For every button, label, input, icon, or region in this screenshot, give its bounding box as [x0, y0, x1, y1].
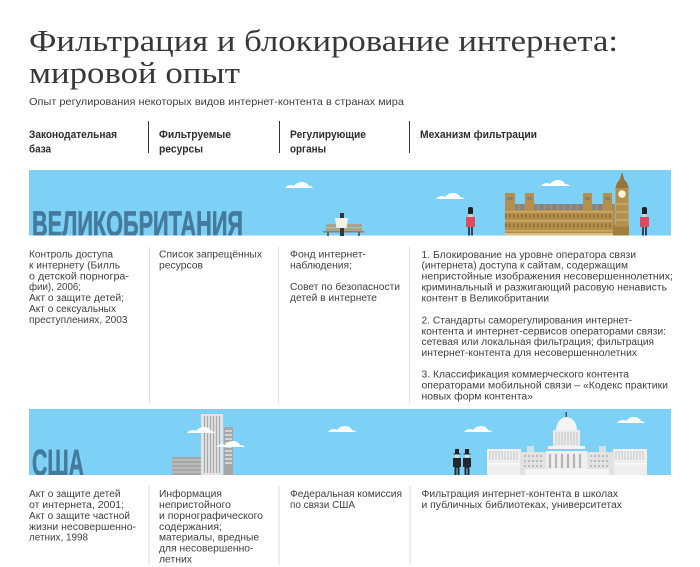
panel: USA details — [29, 486, 622, 566]
text: filtering mechanism: операторами мобильной связи – «Кодекс практики — [422, 380, 668, 392]
column headers — [29, 121, 537, 156]
title: мировой опыт — [29, 55, 241, 90]
subtitle: Опыт регулирования некоторых видов интернет-контента в странах мира — [29, 96, 404, 108]
text: legal basis: летних, 1998 — [29, 532, 88, 544]
column headers: Регулирующие — [290, 129, 366, 141]
column headers: база — [29, 144, 52, 156]
text: filtering mechanism: контента и интернет-сервисов операторами связи: — [422, 326, 666, 338]
text: legal basis: жизни несовершенно- — [29, 522, 136, 533]
text: filtering mechanism: Фильтрация интернет-контента в школах — [422, 489, 618, 500]
text: legal basis: Акт о защите детей — [29, 489, 120, 500]
column headers: органы — [290, 144, 326, 156]
text: filtering mechanism: и публичных библиотеках, университетах — [422, 499, 622, 511]
text: regulators: наблюдения; — [290, 260, 352, 272]
text: filtering mechanism: сетевая или локальная фильтрация; фильтрация — [422, 336, 654, 348]
icon: Palace of Westminster — [505, 172, 629, 236]
text: filtered resources: содержания; — [159, 522, 222, 533]
heading: United Kingdom: ВЕЛИКОБРИТАНИЯ — [32, 205, 243, 244]
text: legal basis — [29, 489, 136, 544]
text: regulators — [290, 489, 402, 511]
text: filtered resources: непристойного — [159, 500, 231, 511]
text: regulators: детей в интернете — [290, 293, 377, 304]
text: regulators: Совет по безопасности — [290, 281, 400, 293]
text: filtering mechanism: непристойные изображения несовершеннолетних; — [422, 270, 673, 282]
title — [29, 23, 618, 90]
panel: USA banner — [29, 409, 671, 475]
text: filtering mechanism: новых форм контента» — [422, 390, 533, 402]
text: filtered resources — [159, 488, 263, 566]
icon: cloud — [285, 182, 313, 188]
text: filtered resources: материалы, вредные — [159, 532, 259, 544]
text: legal basis: к интернету (Билль — [29, 260, 120, 272]
icon: cloud — [617, 417, 645, 423]
text: filtering mechanism — [422, 489, 622, 511]
text: legal basis: Акт о защите детей; — [29, 293, 124, 304]
text: legal basis: Контроль доступа — [29, 250, 113, 260]
text: regulators: по связи США — [290, 500, 355, 511]
heading: USA: США — [32, 442, 84, 484]
icon: guard — [466, 207, 475, 236]
icon: cloud — [436, 193, 464, 199]
text: filtering mechanism — [422, 250, 673, 402]
panel: United Kingdom banner — [29, 170, 671, 236]
text: filtered resources: летних — [159, 554, 192, 566]
text: filtering mechanism: 1. Блокирование на уровне оператора связи — [422, 250, 636, 261]
text: regulators: Фонд интернет- — [290, 250, 366, 260]
text: legal basis: Акт о сексуальных — [29, 304, 116, 315]
icon: person on bench — [323, 213, 364, 236]
icon: skyscrapers — [172, 414, 233, 475]
column headers: ресурсы — [159, 144, 203, 156]
text: filtered resources: Список запрещённых — [159, 250, 262, 260]
text: filtering mechanism: интернет-контента для несовершеннолетних — [422, 348, 637, 359]
title: Фильтрация и блокирование интернета: — [29, 23, 618, 58]
text: filtered resources: для несовершенно- — [159, 544, 254, 554]
icon: cloud — [541, 180, 570, 186]
icon: guard — [640, 207, 649, 236]
icon: cloud — [328, 426, 356, 432]
column headers: Механизм фильтрации — [420, 129, 537, 141]
text: legal basis: о детской порногра- — [29, 272, 129, 282]
text: filtering mechanism: криминальный и разжигающий расовую ненависть — [422, 282, 667, 294]
text: filtering mechanism: контент в Великобритании — [422, 292, 549, 304]
text: legal basis: Акт о защите частной — [29, 511, 130, 522]
text: filtered resources — [159, 250, 262, 272]
text: filtering mechanism: (интернета) доступа к сайтам, содержащим — [422, 260, 628, 272]
text: legal basis: преступлениях, 2003 — [29, 315, 128, 326]
text: legal basis: от интернета, 2001; — [29, 500, 124, 511]
panel: United Kingdom details — [29, 247, 673, 403]
column headers: Законодательная — [29, 129, 117, 141]
icon: Capitol building — [487, 412, 647, 475]
icon: two men in top hats — [453, 449, 471, 475]
text: filtered resources: и порнографического — [159, 510, 263, 522]
icon: cloud — [187, 427, 215, 433]
icon: cloud — [464, 426, 492, 432]
text: legal basis — [29, 250, 129, 326]
text: filtering mechanism: 2. Стандарты саморегулирования интернет- — [422, 316, 632, 326]
text: regulators: Федеральная комиссия — [290, 489, 402, 500]
text: filtered resources: Информация — [159, 488, 222, 500]
text: regulators — [290, 250, 400, 304]
column headers: Фильтруемые — [159, 129, 231, 141]
text: filtered resources: ресурсов — [159, 260, 203, 272]
text: filtering mechanism: 3. Классификация коммерческого контента — [422, 368, 629, 380]
text: legal basis: фии), 2006; — [29, 281, 81, 293]
icon: cloud — [216, 441, 245, 447]
